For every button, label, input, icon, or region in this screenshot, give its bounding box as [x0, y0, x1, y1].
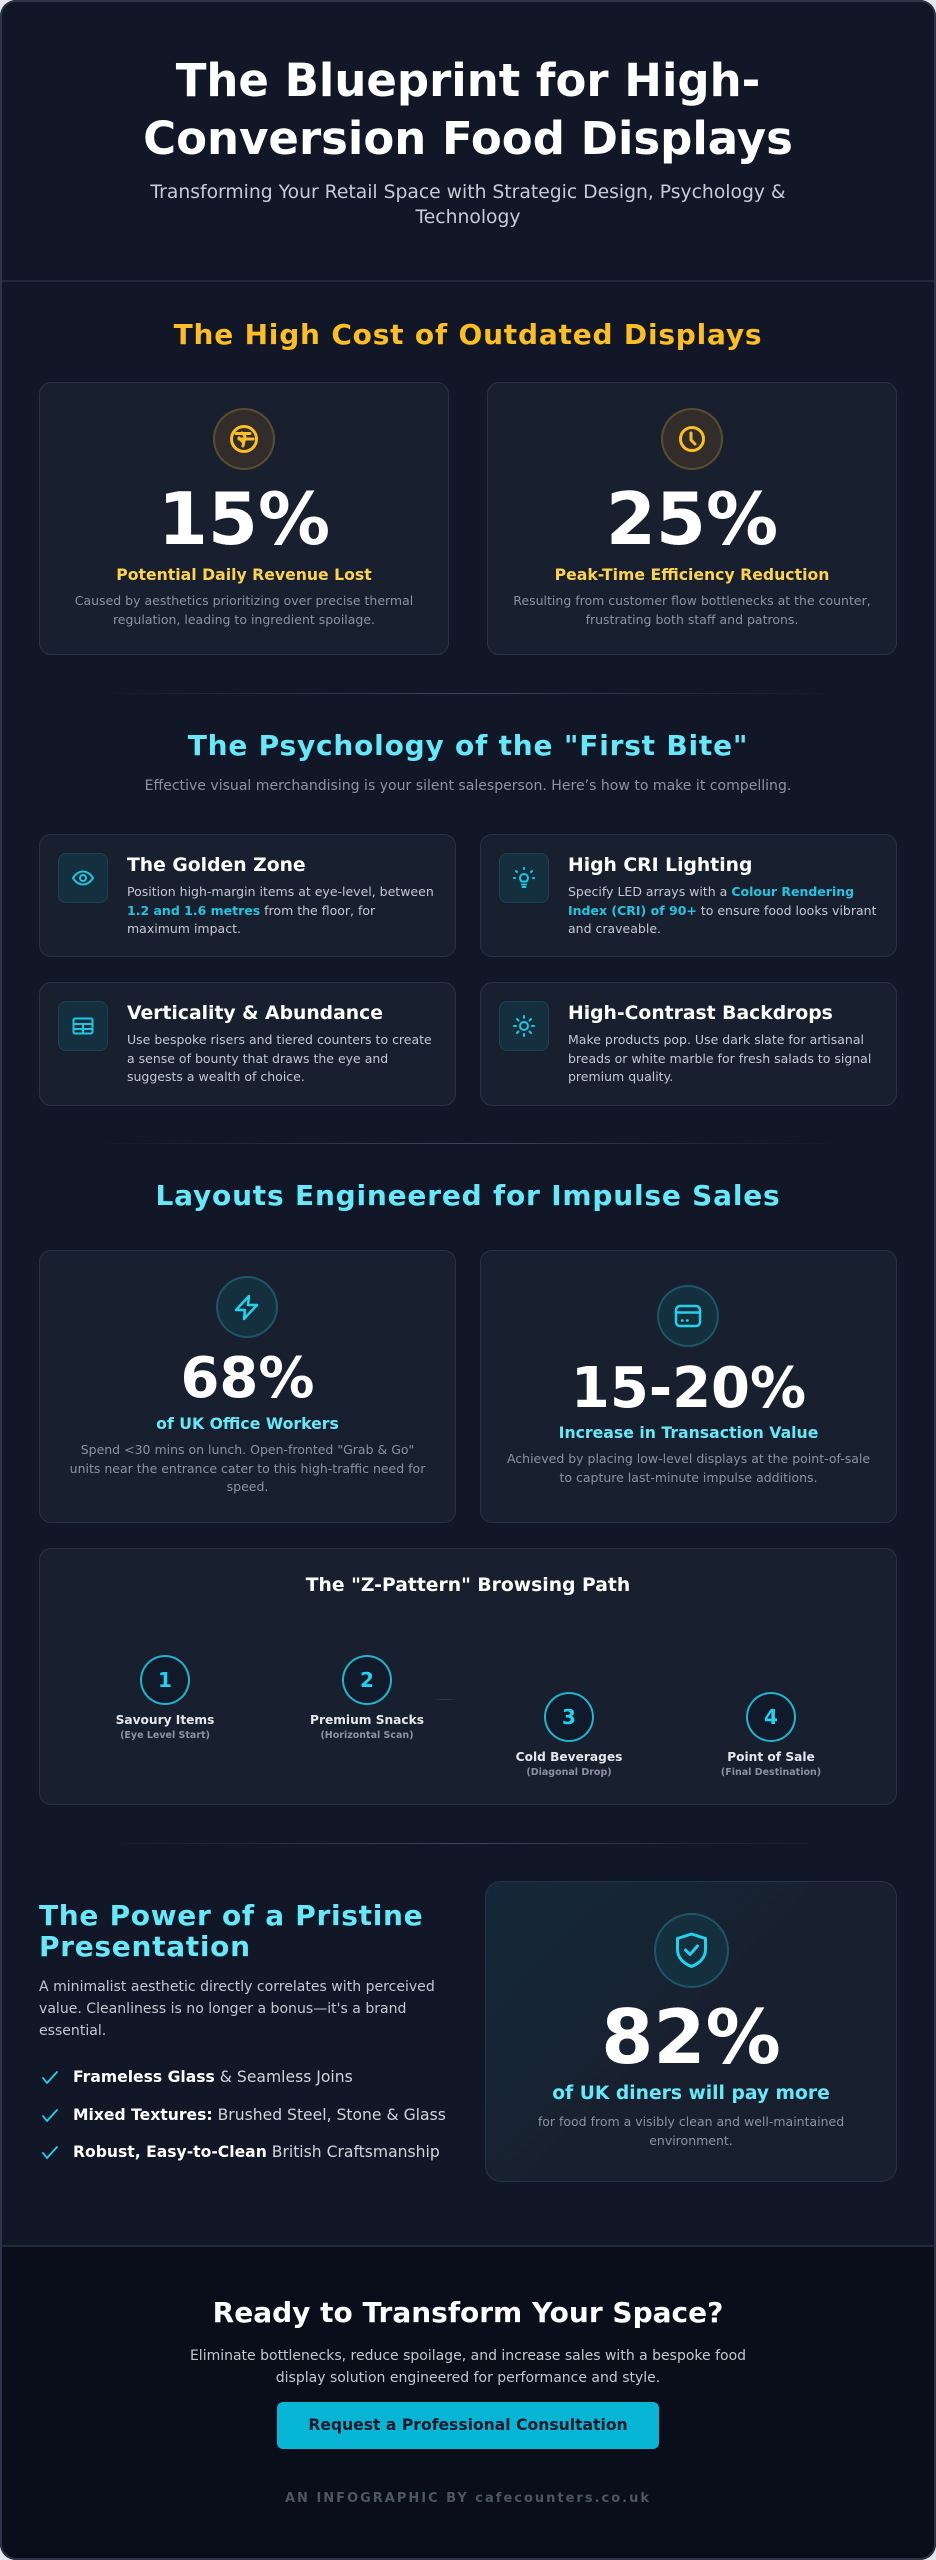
stat label: Increase in Transaction Value [559, 1423, 818, 1442]
card text [568, 1032, 871, 1084]
card text: Position high-margin items at eye-level, between [127, 884, 434, 899]
button: Request a Professional Consultation [308, 2416, 628, 2434]
footer text [190, 2348, 746, 2386]
icon: lightning bolt [216, 1276, 278, 1338]
stat description: environment. [649, 2133, 733, 2148]
step number: 2 [360, 1668, 374, 1692]
card title: Verticality & Abundance [127, 1003, 383, 1024]
subtitle [150, 182, 786, 228]
stat description: regulation, leading to ingredient spoilage. [113, 612, 375, 627]
card text: Make products pop. Use dark slate for artisanal [568, 1032, 864, 1047]
stat number: 68% [180, 1346, 315, 1411]
checklist [42, 2068, 446, 2161]
stat description [513, 593, 871, 627]
icon: tiers table [58, 1001, 108, 1051]
card text: breads or white marble for fresh salads to signal [568, 1051, 871, 1066]
section paragraph: A minimalist aesthetic directly correlates with perceived [39, 1979, 435, 1995]
stat description [538, 2114, 844, 2148]
section paragraph: essential. [39, 2023, 106, 2039]
title: Conversion Food Displays [143, 112, 793, 165]
icon: clock [661, 408, 723, 470]
step 1 [116, 1655, 214, 1741]
footer text: display solution engineered for performance and style. [276, 2370, 660, 2386]
heading: pristine presentation: Presentation [39, 1930, 251, 1963]
step sublabel: (Final Destination) [721, 1767, 821, 1778]
icon: light bulb [499, 853, 549, 903]
section intro: Effective visual merchandising is your silent salesperson. Here’s how to make it compelling. [145, 778, 791, 794]
panel: backdrops [480, 982, 897, 1106]
panel: 82 percent stat [485, 1881, 897, 2182]
footer text: Eliminate bottlenecks, reduce spoilage, and increase sales with a bespoke food [190, 2348, 746, 2364]
heading: layouts: Layouts Engineered for Impulse Sales [156, 1179, 780, 1212]
step label: Cold Beverages [516, 1750, 622, 1764]
stat description: Caused by aesthetics prioritizing over precise thermal [75, 593, 413, 608]
stat description: units near the entrance cater to this high-traffic need for [70, 1461, 425, 1476]
card text [568, 884, 876, 936]
step number [342, 1655, 392, 1705]
list item: Frameless Glass & Seamless Joins [73, 2068, 353, 2086]
step sublabel: (Diagonal Drop) [526, 1767, 612, 1778]
stat number: 25% [606, 477, 778, 561]
stat description: to capture last-minute impulse additions. [559, 1470, 818, 1485]
icon: check [42, 2071, 58, 2084]
stat description: Achieved by placing low-level displays at the point-of-sale [507, 1451, 870, 1466]
card text: a sense of bounty that draws the eye and [127, 1051, 388, 1066]
stat description: speed. [227, 1479, 268, 1494]
heading: psychology: The Psychology of the "First Bite" [188, 729, 748, 762]
panel: CRI lighting [480, 834, 897, 957]
step label: Premium Snacks [310, 1713, 424, 1727]
subtitle: Technology [415, 207, 521, 228]
subtitle: Transforming Your Retail Space with Strategic Design, Psychology & [150, 182, 786, 203]
icon: check [42, 2146, 58, 2159]
panel: golden zone [39, 834, 456, 957]
card text: 1.2 and 1.6 metres from the floor, for [127, 903, 375, 918]
stat description [70, 1442, 426, 1494]
credit: AN INFOGRAPHIC BY cafecounters.co.uk [285, 2491, 651, 2506]
heading: pristine presentation [39, 1899, 423, 1963]
step 4 [721, 1692, 821, 1778]
panel: Z-pattern browsing path [39, 1548, 897, 1805]
card text: maximum impact. [127, 921, 241, 936]
panel: 68 percent stat [39, 1250, 456, 1523]
panel: 15 percent stat [39, 382, 449, 655]
card text: and craveable. [568, 921, 661, 936]
step number: 3 [562, 1705, 576, 1729]
header [0, 0, 936, 282]
list item: Robust, Easy-to-Clean British Craftsmanship [73, 2143, 440, 2161]
icon: payment card [657, 1285, 719, 1347]
stat label: of UK Office Workers [156, 1414, 339, 1433]
stat description: for food from a visibly clean and well-maintained [538, 2114, 844, 2129]
step 3 [516, 1692, 622, 1778]
path connector [432, 1699, 458, 1700]
icon: sun [499, 1001, 549, 1051]
card text: Index (CRI) of 90+ to ensure food looks vibrant [568, 903, 876, 918]
step number [140, 1655, 190, 1705]
stat description: Resulting from customer flow bottlenecks at the counter, [513, 593, 871, 608]
step number: 4 [764, 1705, 778, 1729]
card title: High CRI Lighting [568, 855, 752, 876]
stat description [75, 593, 413, 627]
stat number: 15% [158, 477, 330, 561]
step number [544, 1692, 594, 1742]
icon: check [42, 2109, 58, 2122]
card text: Specify LED arrays with a Colour Rendering [568, 884, 854, 899]
step label: Point of Sale [727, 1750, 815, 1764]
step sublabel: (Horizontal Scan) [320, 1730, 414, 1741]
stat number: 82% [601, 1993, 781, 2081]
button [277, 2402, 659, 2449]
footer call to action [0, 2245, 936, 2560]
panel: 25 percent stat [487, 382, 897, 655]
stat label: of UK diners will pay more [552, 2083, 830, 2104]
stat description: Spend <30 mins on lunch. Open-fronted "Grab & Go" [81, 1442, 414, 1457]
card text: premium quality. [568, 1069, 673, 1084]
stat description: frustrating both staff and patrons. [586, 612, 798, 627]
list item: Mixed Textures: Brushed Steel, Stone & Glass [73, 2106, 446, 2124]
step number: 1 [158, 1668, 172, 1692]
card text: Use bespoke risers and tiered counters to create [127, 1032, 432, 1047]
footer heading: Ready to Transform Your Space? [213, 2296, 723, 2329]
heading: high cost: The High Cost of Outdated Displays [174, 318, 762, 351]
heading: pristine presentation: The Power of a Pristine [39, 1899, 423, 1932]
stat label: Peak-Time Efficiency Reduction [555, 565, 829, 584]
card title: High-Contrast Backdrops [568, 1003, 833, 1024]
card text: suggests a wealth of choice. [127, 1069, 305, 1084]
panel: 15-20 percent stat [480, 1250, 897, 1523]
step label: Savoury Items [116, 1713, 214, 1727]
stat description [507, 1451, 870, 1485]
step 2 [310, 1655, 424, 1741]
title [143, 54, 793, 165]
panel title: The "Z-Pattern" Browsing Path [306, 1575, 630, 1596]
step number [746, 1692, 796, 1742]
section paragraph [39, 1979, 435, 2039]
step sublabel: (Eye Level Start) [120, 1730, 210, 1741]
panel: verticality [39, 982, 456, 1106]
stat number: 15-20% [571, 1356, 806, 1421]
icon: revenue coin [213, 408, 275, 470]
icon: eye [58, 853, 108, 903]
icon: shield check [654, 1913, 729, 1988]
card text [127, 1032, 432, 1084]
card title: The Golden Zone [127, 855, 306, 876]
section paragraph: value. Cleanliness is no longer a bonus—it's a brand [39, 2001, 406, 2017]
card text [127, 884, 434, 936]
stat label: Potential Daily Revenue Lost [116, 565, 372, 584]
title: The Blueprint for High- [176, 54, 760, 107]
